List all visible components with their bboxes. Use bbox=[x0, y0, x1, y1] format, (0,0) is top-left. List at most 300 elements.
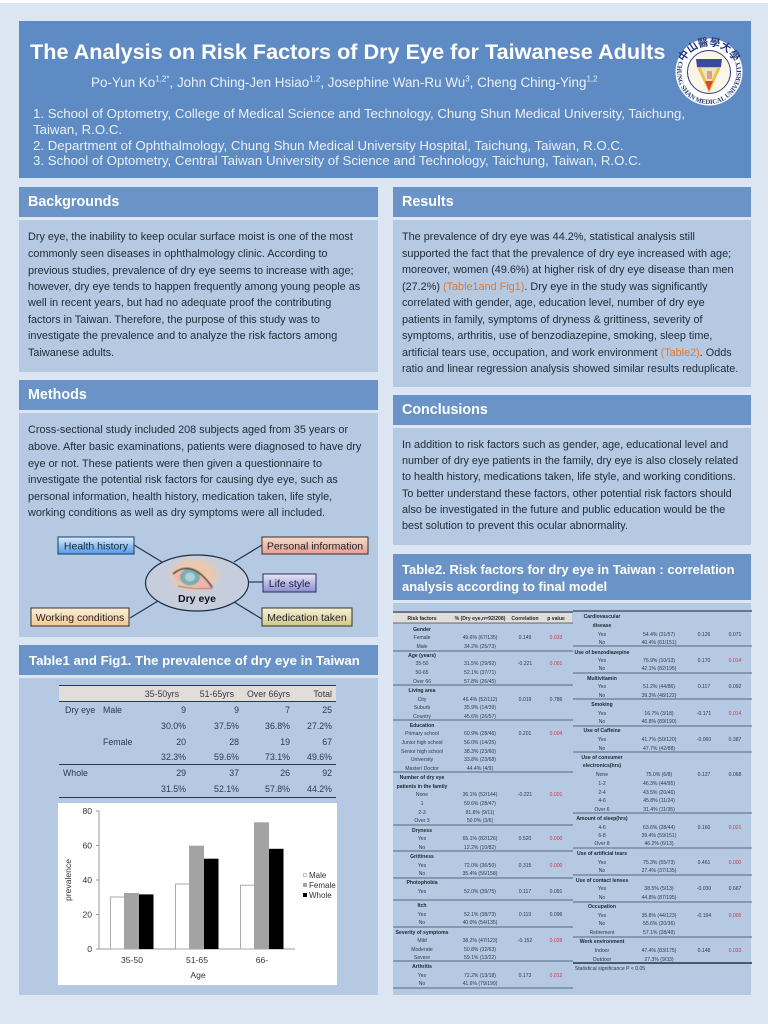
box: life style: Life style bbox=[269, 578, 310, 590]
panel: table 2 bbox=[393, 554, 751, 995]
text block: backgrounds: factors in Taiwan. Therefore, the purpose of this study was to bbox=[28, 314, 320, 326]
panel: conclusions bbox=[393, 395, 751, 545]
text block: backgrounds: however, dry eye tends to happen frequently among young people as bbox=[28, 281, 360, 293]
table 2: right column: Use of Caffeine bbox=[583, 728, 621, 734]
table 2: right column: Yes bbox=[598, 860, 607, 866]
table 2: right column: Statistical significance P < 0.05 bbox=[575, 966, 645, 972]
table 2: left column: Master/ Doctor bbox=[405, 766, 439, 772]
table 2: right column: No bbox=[599, 693, 605, 699]
text block: results: moreover, women (49.6%) at higher risk of dry eye disease than men bbox=[402, 264, 734, 276]
table 2: left column: Yes bbox=[418, 973, 427, 979]
table 2: left column: 65.1% (82/126) bbox=[463, 836, 498, 842]
text block: methods: personal information, health history, medication taken, life style, bbox=[28, 491, 332, 503]
table 1: 37.5% bbox=[214, 721, 239, 731]
table 2: left column: 57.8% (26/45) bbox=[464, 679, 496, 685]
table 2: left column: Severe bbox=[414, 955, 430, 961]
text block: backgrounds: investigate the prevalence and to analyze the risk factors among bbox=[28, 330, 337, 342]
table 2: left column: Female bbox=[414, 635, 431, 641]
table 2: left column: 60.9% (28/46) bbox=[464, 731, 496, 737]
table 2: right column: 46.2% (6/13) bbox=[644, 841, 674, 847]
heading: table 2 bbox=[393, 554, 751, 600]
table 2: right column: Indoor bbox=[595, 948, 610, 954]
text block: conclusions: number of dry eye patients in the family, dry eye is also closely related bbox=[402, 455, 738, 467]
table 2: right column: Use of consumer bbox=[581, 755, 623, 761]
table 2: left column: Primary school bbox=[405, 731, 439, 737]
table 2: left column: 0.117 bbox=[519, 889, 531, 895]
table 2: right column: 4-6 bbox=[598, 825, 606, 831]
text block: results: correlated with gender, age, education level, number of dry eye bbox=[402, 297, 705, 309]
table 2: right column: No bbox=[599, 640, 605, 646]
table 1: 67 bbox=[322, 737, 332, 747]
table 2: left column: No bbox=[419, 845, 425, 851]
text block: methods: above. After basic examinations, patients were diagnosed to have dry bbox=[28, 441, 361, 453]
table 2: right column: 0.071 bbox=[729, 632, 742, 638]
table 2: right column: 57.1% (28/49) bbox=[643, 930, 675, 936]
table 1: 32.3% bbox=[161, 752, 186, 762]
table 1: 28 bbox=[229, 737, 239, 747]
icon: university seal: CHUNG SHAN MEDICAL UNIVERSITY bbox=[676, 62, 741, 104]
table 2: right column: Occupation bbox=[588, 904, 616, 910]
table 2: left column: 46.4% (52/112) bbox=[463, 697, 498, 703]
table 2: right column: Yes bbox=[598, 684, 607, 690]
header banner bbox=[19, 21, 751, 178]
heading: methods bbox=[19, 380, 378, 410]
table 2: left column: 35.9% (14/39) bbox=[464, 705, 496, 711]
table 2: left column: patients in the family bbox=[397, 784, 447, 790]
table 2: right column: 0.014 bbox=[729, 658, 742, 664]
table 2: right column: 0.033 bbox=[729, 948, 742, 954]
table 2: right column: -0.030 bbox=[697, 886, 711, 892]
heading: methods: Methods bbox=[28, 387, 87, 403]
table 2: left column: Risk factors bbox=[407, 616, 437, 622]
table 2: right column: 0.068 bbox=[729, 772, 742, 778]
affiliations: Taiwan, R.O.C. bbox=[33, 122, 122, 137]
table 1: 31.5% bbox=[161, 784, 186, 794]
table 2: right column: Yes bbox=[598, 658, 607, 664]
table 2: left column: % (Dry eye,n=92/208) bbox=[455, 616, 506, 622]
table 2: right column: 0.387 bbox=[729, 737, 742, 743]
table 2: right column: 55.6% (20/36) bbox=[643, 921, 675, 927]
table 2: left column: 0.315 bbox=[519, 863, 532, 869]
table 2: left column: 44.4% (4/9) bbox=[467, 766, 493, 772]
table 2: left column: Suburb bbox=[414, 705, 430, 711]
table 2: left column: 50-65 bbox=[415, 670, 429, 676]
text block: backgrounds: previous studies, prevalence of dry eye seems to increase with age; bbox=[28, 265, 353, 277]
table 2: right column: 38.5% (5/13) bbox=[644, 886, 674, 892]
table 2: right column: Yes bbox=[598, 711, 607, 717]
table 2: right column: 2-4 bbox=[598, 790, 606, 796]
table 2: right column: -0.171 bbox=[697, 711, 711, 717]
table 2: left column: Correlation bbox=[511, 616, 539, 622]
affiliations: 2. Department of Ophthalmology, Chung Shun Medical University Hospital, Taichung, Taiwan, R.O.C. bbox=[33, 138, 624, 153]
table 2: right column: 45.8% (11/24) bbox=[643, 798, 675, 804]
table 2: left column: 45.6% (26/57) bbox=[464, 714, 496, 720]
table 2: right column: Over 6 bbox=[594, 807, 610, 813]
bars: 51-65 bbox=[176, 846, 218, 949]
box: personal information: Personal information bbox=[267, 540, 363, 552]
heading: conclusions: Conclusions bbox=[402, 402, 488, 418]
table 1: 36.8% bbox=[265, 721, 290, 731]
table 2: left column: 40.0% (54/135) bbox=[463, 920, 498, 926]
text block: conclusions bbox=[393, 428, 751, 545]
table 2: right column: 40.4% (61/151) bbox=[642, 640, 677, 646]
table 2: left column: Yes bbox=[418, 863, 427, 869]
bar chart: prevalence by age: Age bbox=[190, 970, 206, 980]
table 1: 73.1% bbox=[265, 752, 290, 762]
box: health history bbox=[58, 537, 134, 554]
table 2: left column: 0.173 bbox=[519, 973, 532, 979]
table 1 bbox=[59, 685, 336, 798]
table 2: left column: 72.2% (13/18) bbox=[464, 973, 496, 979]
table 2: right column: disease bbox=[593, 623, 612, 629]
table 2: right column: Over 8 bbox=[594, 841, 610, 847]
affiliations: 3. School of Optometry, Central Taiwan University of Science and Technology, Taichung, Taiwan, R.O.C. bbox=[33, 153, 641, 168]
table 2: right column: None bbox=[596, 772, 608, 778]
table 2: right column: 43.5% (20/46) bbox=[643, 790, 675, 796]
table 2: left column: 72.0% (36/50) bbox=[464, 863, 496, 869]
table 1: 44.2% bbox=[307, 784, 332, 794]
table 2: left column: Junior high school bbox=[401, 740, 443, 746]
table 2: left column: Over 3 bbox=[414, 818, 430, 824]
table 2: right column: 41.7% (50/120) bbox=[642, 737, 677, 743]
box: medication taken bbox=[262, 608, 352, 626]
table 2: right column: Use of benzodiazepine bbox=[575, 650, 630, 656]
table 2: left column: Age (years) bbox=[408, 653, 436, 659]
table 2: right column: No bbox=[599, 868, 605, 874]
bar chart: prevalence by age: 40 bbox=[82, 875, 92, 885]
text block: results: patients in family, symptoms of dryness & grittiness, severity of bbox=[402, 314, 703, 326]
table 2: left column: 50.8% (32/63) bbox=[464, 947, 496, 953]
table 2: left column: Yes bbox=[418, 889, 427, 895]
table 2: right column: Yes bbox=[598, 737, 607, 743]
table 2: left column: Over 66 bbox=[413, 679, 431, 685]
table 1: Total bbox=[313, 689, 332, 699]
box: life style bbox=[263, 574, 316, 592]
table 2: right column: 0.160 bbox=[698, 825, 711, 831]
table 2: left column: 33.8% (23/68) bbox=[464, 757, 496, 763]
bar chart: prevalence by age: 60 bbox=[82, 840, 92, 850]
text block: backgrounds: well in recent years, but had no adequate proof the contributing bbox=[28, 297, 331, 309]
table 2: right column: 0.667 bbox=[729, 886, 742, 892]
table 2: left column bbox=[393, 611, 573, 988]
table 2: right column: No bbox=[599, 719, 605, 725]
table 2: right column: 47.4% (83/175) bbox=[642, 948, 677, 954]
table 1: 52.1% bbox=[214, 784, 239, 794]
table 2: right column: Retirement bbox=[590, 930, 615, 936]
table 2: left column: No bbox=[419, 871, 425, 877]
table 2: left column: 2-3 bbox=[418, 810, 426, 816]
table 2: right column: 35.8% (44/123) bbox=[642, 913, 677, 919]
table 2: left column: -0.221 bbox=[518, 661, 532, 667]
panel: backgrounds bbox=[19, 187, 378, 372]
table 2: left column: 0.096 bbox=[550, 912, 563, 918]
bars: 35-50 bbox=[110, 893, 154, 949]
legend: Male bbox=[309, 871, 327, 880]
table 1: 51-65yrs bbox=[200, 689, 235, 699]
table 2: right column: Yes bbox=[598, 632, 607, 638]
table 2: left column: Senior high school bbox=[401, 749, 443, 755]
table 2: right column: 42.1% (82/195) bbox=[642, 666, 677, 672]
heading: results: Results bbox=[402, 194, 454, 210]
table 2: left column: 0.019 bbox=[519, 697, 532, 703]
text block: results: artificial tears use, occupation, and work environment (Table2). Odds bbox=[402, 347, 732, 359]
table 2: left column: 0.201 bbox=[519, 731, 532, 737]
table 2: left column: Itch bbox=[417, 903, 427, 909]
table 2: left column: 52.0% (39/75) bbox=[464, 889, 496, 895]
heading: results bbox=[393, 187, 751, 217]
table 2: left column: 34.2% (25/73) bbox=[464, 644, 496, 650]
table 2: left column: 0.004 bbox=[550, 731, 563, 737]
text block: backgrounds: commonly seen diseases in ophthalmology clinic. According to bbox=[28, 248, 328, 260]
table 2: right column: Use of artificial tears bbox=[577, 851, 627, 857]
icon: university seal: 中山醫學大學 bbox=[678, 37, 741, 61]
table 2: right column: Outdoor bbox=[593, 957, 612, 963]
heading: table1 and fig1: Table1 and Fig1. The prevalence of dry eye in Taiwan bbox=[29, 653, 360, 668]
table 2: left column: 35-50 bbox=[415, 661, 429, 667]
panel: table 1 and figure 1 bbox=[19, 645, 378, 995]
table 1: Male bbox=[103, 705, 122, 715]
bar chart: prevalence by age: 66- bbox=[256, 955, 268, 965]
table 2: right column: -0.060 bbox=[697, 737, 711, 743]
text block: methods bbox=[19, 413, 378, 637]
table 2: right column: 4-6 bbox=[598, 798, 606, 804]
heading: backgrounds: Backgrounds bbox=[28, 194, 119, 210]
table 2: left column: Photophobia bbox=[406, 880, 438, 886]
table 1: 9 bbox=[234, 705, 239, 715]
table 2: right column bbox=[573, 610, 752, 972]
table 2: left column: Yes bbox=[418, 912, 427, 918]
text block: backgrounds: Dry eye, the inability to keep ocular surface moist is one of the most bbox=[28, 231, 353, 243]
table 2: right column: Multivitamin bbox=[587, 676, 617, 682]
table 2: right column: 76.9% (10/13) bbox=[643, 658, 675, 664]
table 2: left column: 56.0% (14/25) bbox=[464, 740, 496, 746]
table 2: right column: Cardiovascular bbox=[584, 614, 620, 620]
table 2: right column: Use of contact lenses bbox=[576, 878, 628, 884]
table 2: left column: 0.028 bbox=[550, 938, 563, 944]
heading: conclusions bbox=[393, 395, 751, 425]
heading: table1 and fig1 bbox=[19, 645, 378, 675]
table 2: left column: p value bbox=[547, 616, 565, 622]
table 2: right column: 46.3% (44/95) bbox=[643, 781, 675, 787]
table 2: left column: 50.0% (3/6) bbox=[467, 818, 493, 824]
table 2: right column: Smoking bbox=[591, 702, 613, 708]
table 1: 7 bbox=[285, 705, 290, 715]
bar chart: prevalence by age: 35-50 bbox=[121, 955, 143, 965]
table 2: left column: University bbox=[411, 757, 434, 763]
text block: conclusions: best solution to prevent this ocular abnormality. bbox=[402, 520, 628, 532]
table 2: right column: Yes bbox=[598, 913, 607, 919]
table 2: right column: No bbox=[599, 921, 605, 927]
table 2: left column: 0.520 bbox=[519, 836, 532, 842]
text block: backgrounds bbox=[19, 220, 378, 372]
table 1: 59.6% bbox=[214, 752, 239, 762]
table 2: left column: 0.119 bbox=[519, 912, 531, 918]
table 2: right column: No bbox=[599, 666, 605, 672]
table 2: right column: 31.4% (11/35) bbox=[643, 807, 675, 813]
text block: conclusions: also be investigated in the future and public education would be the bbox=[402, 504, 725, 516]
text block: methods: eye or not. These patients were then given a questionnaire to bbox=[28, 458, 322, 470]
legend: Whole bbox=[309, 891, 332, 900]
table 2: right column: 63.6% (28/44) bbox=[643, 825, 675, 831]
table 2: left column: -0.221 bbox=[518, 792, 532, 798]
table 1: 20 bbox=[176, 737, 186, 747]
table 2: right column: 44.8% (87/195) bbox=[642, 895, 677, 901]
table 2: right column: 0.000 bbox=[729, 860, 742, 866]
table 2: right column: Amount of sleep(hrs) bbox=[576, 816, 628, 822]
table 2: left column: Country bbox=[413, 714, 431, 720]
table 2: left column: 59.6% (28/47) bbox=[464, 801, 496, 807]
table 2: right column: Work environment bbox=[580, 939, 625, 945]
table 2: left column: City bbox=[418, 697, 427, 703]
table 2: right column: 1-2 bbox=[598, 781, 606, 787]
text block: conclusions: To better understand these factors, other potential risk factors should bbox=[402, 488, 732, 500]
box: working conditions bbox=[31, 608, 129, 626]
legend: Female bbox=[309, 881, 336, 890]
box: medication taken: Medication taken bbox=[267, 612, 347, 624]
affiliations: 1. School of Optometry, College of Medical Science and Technology, Chung Shun Medical University, Taichung, bbox=[33, 106, 685, 121]
table 2: left column: 0.000 bbox=[550, 836, 563, 842]
bar chart: prevalence by age: 51-65 bbox=[186, 955, 208, 965]
table 2: right column: 0.127 bbox=[698, 772, 711, 778]
table 2: right column: 39.4% (59/151) bbox=[642, 833, 677, 839]
table 2: left column: 52.1% (38/73) bbox=[464, 912, 496, 918]
table 2: right column: 27.3% (9/33) bbox=[644, 957, 674, 963]
table 2: left column: 0.001 bbox=[550, 661, 563, 667]
bar chart: prevalence by age bbox=[58, 803, 337, 985]
text block: methods: investigate the potential risk factors for causing dye eye, such as bbox=[28, 474, 338, 486]
table 2: left column: 36.1% (52/144) bbox=[463, 792, 498, 798]
table 2: right column: Yes bbox=[598, 886, 607, 892]
table 1: 9 bbox=[181, 705, 186, 715]
text block: results: symptoms, arthritis, use of benzodiazepine, smoking, sleep time, bbox=[402, 330, 712, 342]
table 2: right column: 0.092 bbox=[729, 684, 742, 690]
text block: results: (27.2%) (Table1and Fig1). Dry eye in the study was significantly bbox=[402, 281, 708, 293]
text block: results bbox=[393, 220, 751, 387]
table 2: left column: Education bbox=[410, 723, 434, 729]
text block: backgrounds: Taiwanese adults. bbox=[28, 347, 114, 359]
table 2: left column: Moderate bbox=[411, 947, 433, 953]
table 2: right column: 0.126 bbox=[698, 632, 711, 638]
table 2: left column: 0.000 bbox=[550, 863, 563, 869]
table 2: left column: No bbox=[419, 920, 425, 926]
table 1: 35-50yrs bbox=[145, 689, 180, 699]
table 1: 25 bbox=[322, 705, 332, 715]
bar chart: prevalence by age: prevalence bbox=[63, 859, 73, 901]
table 1: 26 bbox=[280, 768, 290, 778]
table 2: left column: Living area bbox=[409, 688, 436, 694]
table 2: right column: 0.461 bbox=[698, 860, 711, 866]
table 2: left column: Male bbox=[416, 644, 428, 650]
table 2: right column: -0.194 bbox=[697, 913, 711, 919]
table 2: right column: 47.7% (42/88) bbox=[643, 746, 675, 752]
bar chart: prevalence by age: 20 bbox=[82, 910, 92, 920]
text block: results: supported the fact that the prevalence of dry eye increased with age; bbox=[402, 248, 731, 260]
table 1: 37 bbox=[229, 768, 239, 778]
table 1: 30.0% bbox=[161, 721, 186, 731]
table 2: right column: 54.4% (31/57) bbox=[643, 632, 675, 638]
table 2: left column: -0.152 bbox=[518, 938, 532, 944]
central ellipse: dry eye bbox=[146, 555, 248, 611]
table 2: left column: 52.1% (37/71) bbox=[464, 670, 496, 676]
text block: conclusions: In addition to risk factors such as gender, age, educational level and bbox=[402, 439, 728, 451]
table 2: right column: 0.117 bbox=[698, 684, 710, 690]
text block: results: ratio and linear regression analysis showed similar results reduplicate. bbox=[402, 363, 738, 375]
table 2: right column: 0.148 bbox=[698, 948, 711, 954]
authors: Po-Yun Ko1,2*, John Ching-Jen Hsiao1,2, Josephine Wan-Ru Wu3, Cheng Ching-Ying1,2 bbox=[91, 75, 598, 90]
table 2: left column: 0.001 bbox=[550, 792, 563, 798]
table 2: left column: Mild bbox=[417, 938, 427, 944]
box: working conditions: Working conditions bbox=[36, 612, 124, 624]
table 2: right column: 16.7% (3/18) bbox=[644, 711, 674, 717]
bar chart: prevalence by age: 80 bbox=[82, 806, 92, 816]
table 2: right column: 0.014 bbox=[729, 711, 742, 717]
legend bbox=[303, 871, 336, 900]
table 2: left column: Number of dry eye bbox=[400, 775, 445, 781]
table 2: right column: 46.8% (89/190) bbox=[642, 719, 677, 725]
table 2: left column: 49.6% (67/135) bbox=[463, 635, 498, 641]
panel: results bbox=[393, 187, 751, 387]
table 2: left column: Severity of symptoms bbox=[396, 930, 449, 936]
table 2: left column: 12.2% (10/82) bbox=[464, 845, 496, 851]
table 2: left column: 1 bbox=[421, 801, 424, 807]
table 2: right column: electronics(hrs) bbox=[583, 763, 621, 769]
affiliations bbox=[33, 106, 685, 168]
table 2: left column: 81.8% (9/11) bbox=[466, 810, 495, 816]
table 2: right column: 6-8 bbox=[598, 833, 606, 839]
table 2: left column: Arthritis bbox=[412, 964, 432, 970]
text block: conclusions: to health history, medications taken, life style, and working conditions. bbox=[402, 471, 736, 483]
table 1: Dry eye bbox=[65, 705, 95, 715]
table 1: 27.2% bbox=[307, 721, 332, 731]
panel: methods bbox=[19, 380, 378, 637]
table 2: left column: 38.2% (47/123) bbox=[463, 938, 498, 944]
table 1: 49.6% bbox=[307, 752, 332, 762]
diagram: dry eye factors bbox=[30, 536, 368, 626]
icon: eye bbox=[165, 555, 223, 595]
table 2: left column: 0.012 bbox=[550, 973, 563, 979]
table 1: 92 bbox=[322, 768, 332, 778]
label: dry eye: Dry eye bbox=[178, 593, 216, 605]
heading: backgrounds bbox=[19, 187, 378, 217]
table 2: left column: 35.4% (56/158) bbox=[463, 871, 498, 877]
table 2: right column: 51.2% (44/86) bbox=[643, 684, 675, 690]
table 2: right column: 27.4% (37/135) bbox=[642, 868, 677, 874]
box: personal information bbox=[262, 537, 368, 554]
title: The Analysis on Risk Factors of Dry Eye for Taiwanese Adults bbox=[30, 39, 665, 64]
table 1: 29 bbox=[176, 768, 186, 778]
box: health history: Health history bbox=[64, 540, 129, 552]
table 2: left column: Gender bbox=[413, 627, 431, 633]
icon: university seal bbox=[676, 37, 742, 106]
table 1: 57.8% bbox=[265, 784, 290, 794]
table 2: right column: 0.021 bbox=[729, 825, 742, 831]
table 1: Over 66yrs bbox=[247, 689, 291, 699]
bar chart: prevalence by age: 0 bbox=[87, 944, 92, 954]
table 2: right column: 39.3% (48/122) bbox=[642, 693, 677, 699]
table 2: left column: 0.786 bbox=[550, 697, 563, 703]
table 2: left column: Grittiness bbox=[410, 854, 434, 860]
table 2: left column: 59.1% (13/22) bbox=[464, 955, 496, 961]
table 1: 19 bbox=[280, 737, 290, 747]
table 2: left column: No bbox=[419, 981, 425, 987]
text block: methods: working conditions as well as dry symptoms were all included. bbox=[28, 507, 325, 519]
table 2: left column: 41.6% (79/190) bbox=[463, 981, 498, 987]
table 1: Whole bbox=[63, 768, 88, 778]
heading: table 2: Table2. Risk factors for dry eye in Taiwan : correlation bbox=[402, 562, 735, 577]
text block: methods: Cross-sectional study included 208 subjects aged from 35 years or bbox=[28, 424, 348, 436]
heading: table 2: analysis according to final model bbox=[402, 579, 607, 594]
table 2: left column: 0.149 bbox=[519, 635, 532, 641]
